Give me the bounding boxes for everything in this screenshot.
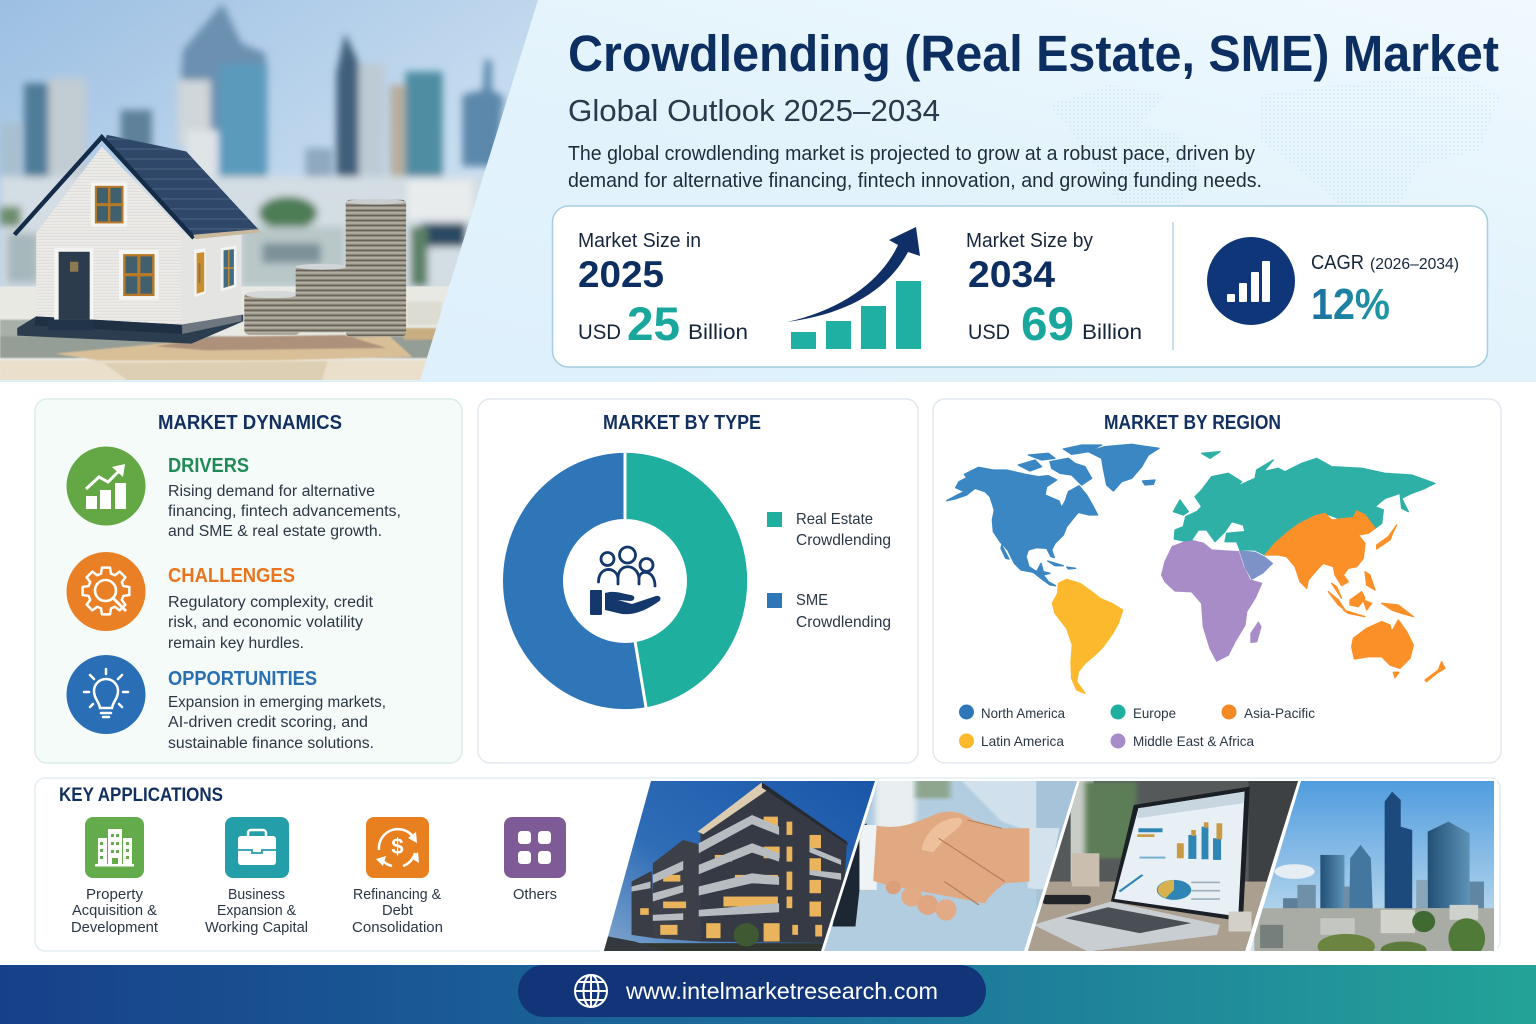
text: opportunities: sustainable finance solutions. [168,735,374,752]
panel: key applications [35,778,1500,951]
photo: apartment building [604,781,875,951]
text: opportunities: Expansion in emerging markets, [168,694,386,711]
icon: opportunities light bulb [66,655,146,734]
footer bar [0,965,1536,1024]
growth bars and arrow icon [787,227,921,349]
intro text: demand for alternative financing, fintech innovation, and growing funding needs. [568,170,1262,192]
legend: type [767,511,891,631]
subtitle: Global Outlook 2025–2034 [568,93,940,128]
heading: key applications: KEY APPLICATIONS [59,785,223,806]
legend: type: Real Estate [796,511,873,528]
legend: type: SME [796,592,828,609]
legend: regions: North America [981,705,1065,721]
legend: regions: Middle East & Africa [1133,733,1254,749]
photo: handshake [824,781,1077,951]
donut chart [503,453,747,709]
market size 2034: 69 [1021,297,1074,350]
application: others [504,817,566,903]
panel: market size card [552,206,1488,367]
application: refinancing: $ [391,834,404,859]
North America [947,444,1159,586]
application: business expansion [205,817,308,936]
market size 2025: 2025 [578,254,664,295]
application: property acquisition: Property [86,887,144,903]
text: opportunities [168,668,386,752]
text: drivers: Rising demand for alternative [168,483,375,500]
coin stacks [244,199,406,336]
market size 2025 [578,230,748,350]
photo: laptop dashboard [1028,781,1298,951]
intro text: The global crowdlending market is projected to grow at a robust pace, driven by [568,143,1255,165]
website pill [518,965,986,1017]
legend: regions: Latin America [981,733,1064,749]
panel: market dynamics [35,399,462,763]
text: challenges: CHALLENGES [168,565,295,587]
market size 2034: Market Size by [966,230,1093,252]
text: drivers: financing, fintech advancements, [168,503,401,520]
photo strip background [600,779,1497,952]
market size 2034 [966,230,1142,350]
Asia-Pacific [1265,511,1445,682]
market size 2034: Billion [1082,321,1142,344]
heading: market dynamics: MARKET DYNAMICS [158,412,342,434]
application: refinancing: Refinancing & [353,887,441,903]
application: property acquisition: Acquisition & [72,903,157,919]
application: refinancing [352,817,443,936]
South America [1052,579,1123,693]
icon: drivers chart [66,446,146,526]
Europe and Russia [1173,452,1435,555]
text: drivers: and SME & real estate growth. [168,523,382,540]
donut centre with people and hand icon [563,519,687,643]
application: business expansion: Working Capital [205,920,308,936]
text: drivers: DRIVERS [168,455,249,477]
market size 2025: USD [578,321,621,344]
skyline backdrop [0,0,538,286]
panel: market by region [933,399,1501,763]
heading: market by type: MARKET BY TYPE [603,412,761,434]
market size 2034: USD [968,321,1010,344]
text: challenges: risk, and economic volatility [168,614,363,631]
Arabian Peninsula [1239,550,1273,580]
Africa [1162,540,1262,661]
header background [0,0,1536,382]
market size 2025: 25 [627,297,680,350]
icon: challenges gear [66,552,146,631]
faint dotted world map [1050,75,1500,210]
icon: CAGR bar chart [1207,237,1295,325]
text: drivers [168,455,401,540]
CAGR value: CAGR [1311,252,1364,274]
heading: market by region: MARKET BY REGION [1104,412,1281,434]
application: business expansion: Expansion & [217,903,296,919]
CAGR value: 12% [1311,280,1390,329]
model house [14,135,260,344]
application: property acquisition [71,817,158,936]
table with banknotes [0,286,449,380]
market size 2025: Billion [688,321,748,344]
title: Crowdlending (Real Estate, SME) Market [568,25,1499,82]
world map [947,444,1445,693]
application: refinancing: Debt [382,903,413,919]
panel: market by type [478,399,918,763]
text: opportunities: AI-driven credit scoring, and [168,714,368,731]
icon: globe [575,975,607,1007]
legend: type: Crowdlending [796,532,891,549]
text: opportunities: OPPORTUNITIES [168,668,317,690]
hero photo: house, coins and skyline [0,0,559,383]
legend: type: Crowdlending [796,614,891,631]
text: challenges [168,565,374,652]
CAGR value [1311,252,1459,329]
legend: regions: Asia-Pacific [1244,705,1315,721]
application: others: Others [513,887,557,903]
application: property acquisition: Development [71,920,158,936]
text: challenges: Regulatory complexity, credit [168,594,374,611]
legend: regions: Europe [1133,705,1176,721]
photo: city skyline [1250,781,1494,951]
CAGR value: (2026–2034) [1370,256,1459,273]
application: business expansion: Business [228,887,285,903]
market size 2034: 2034 [968,254,1055,295]
text: challenges: remain key hurdles. [168,635,304,652]
legend: regions [959,704,1315,749]
application: refinancing: Consolidation [352,920,443,936]
website address: www.intelmarketresearch.com [625,978,938,1004]
market size 2025: Market Size in [578,230,701,252]
intro text [568,143,1262,192]
